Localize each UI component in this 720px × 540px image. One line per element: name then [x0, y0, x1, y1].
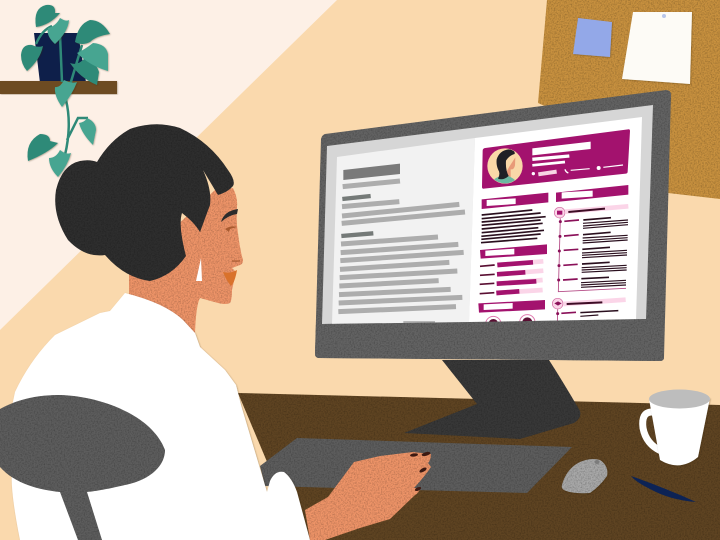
- sticky note: white with pin: [622, 12, 692, 84]
- neck and face: [129, 188, 243, 333]
- resume skill bars: [480, 261, 543, 294]
- sticky note: blue: [573, 18, 612, 57]
- mouse: [562, 459, 607, 493]
- monitor stand: [404, 360, 580, 439]
- eyebrow: [221, 209, 238, 222]
- shelf with plant: [0, 5, 117, 177]
- resume: right page: [478, 129, 630, 332]
- monitor chin: [315, 318, 664, 361]
- resume summary text: [481, 210, 546, 243]
- plant stems: [36, 26, 88, 155]
- chair back: [0, 395, 165, 540]
- eye: [225, 226, 237, 232]
- nostril: [232, 260, 240, 262]
- hand and forearm: [305, 451, 431, 540]
- document text: left page: [338, 164, 465, 322]
- left page: [332, 138, 475, 324]
- monitor: [315, 90, 671, 361]
- shirt: [10, 293, 310, 540]
- fingernails: [410, 451, 431, 492]
- monitor frame: [315, 90, 671, 361]
- keyboard: [260, 438, 572, 493]
- plant pot: [34, 33, 86, 86]
- resume timeline: [552, 206, 628, 323]
- screen: [322, 105, 653, 324]
- coffee cup: [643, 390, 710, 465]
- desk: [238, 393, 720, 540]
- lips: [223, 270, 237, 286]
- resume language circles: [486, 315, 535, 332]
- right page: [469, 117, 642, 323]
- resume header: [482, 129, 630, 189]
- earring: [196, 258, 202, 281]
- resume section headings: [478, 185, 628, 313]
- woman: [10, 124, 310, 540]
- cork board: [538, 0, 720, 199]
- shelf: [0, 81, 117, 94]
- plant leaves: [21, 5, 110, 177]
- hair: [55, 124, 234, 281]
- pen: [631, 476, 696, 502]
